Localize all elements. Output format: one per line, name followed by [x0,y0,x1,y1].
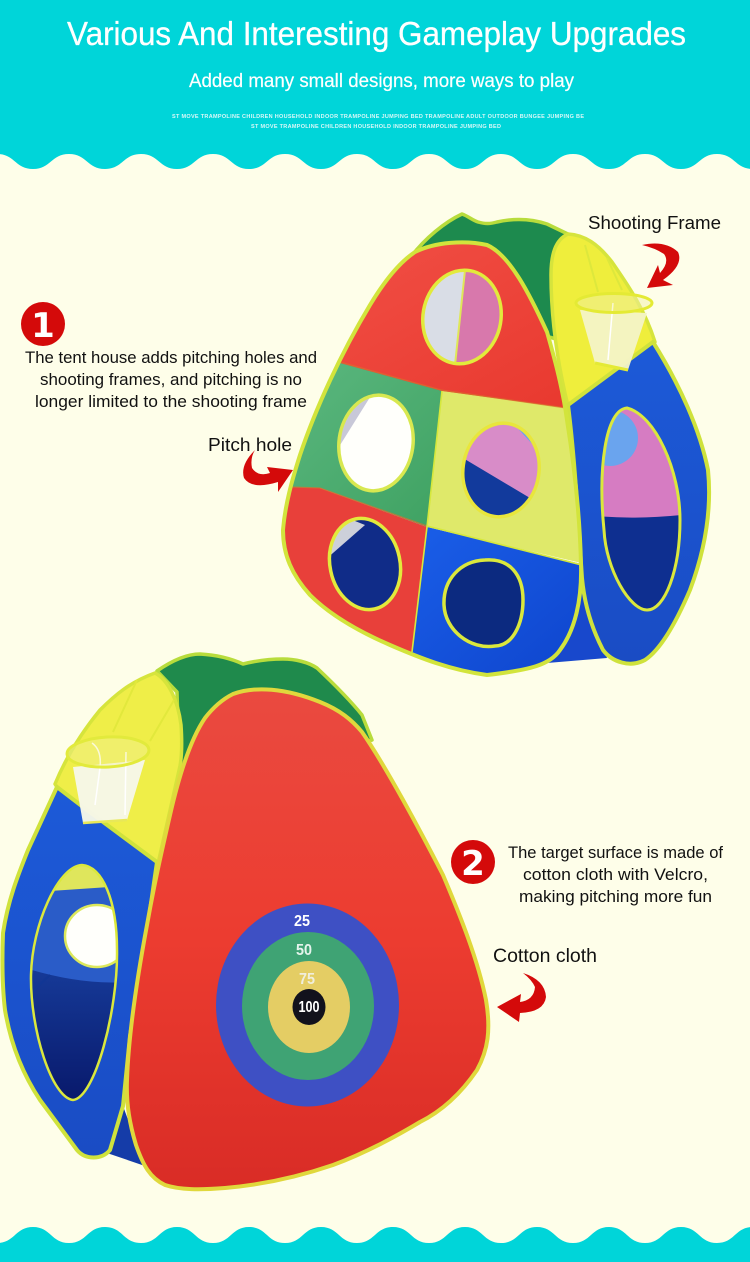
callout 2 text: The target surface is made of [508,844,723,862]
basketball shooting frame [576,245,652,370]
callout 1 text: shooting frames, and pitching is no [40,371,302,389]
blue side panel with opening [2,787,157,1158]
label: shooting frame: Shooting Frame [588,212,721,233]
front panel outline [283,242,581,675]
arrow: cotton cloth [497,973,546,1022]
tent back green roof [410,214,572,340]
target: 100 [298,999,320,1016]
red target panel [127,689,488,1189]
fine print: ST MOVE TRAMPOLINE CHILDREN HOUSEHOLD INDOOR TRAMPOLINE JUMPING BED [251,124,501,130]
callout 2 text: cotton cloth with Velcro, [523,866,708,884]
tent photo: front with pitching holes [270,214,709,680]
callout 1 text: longer limited to the shooting frame [35,393,307,411]
hole: top [421,268,503,366]
title: Various And Interesting Gameplay Upgrades [67,15,686,52]
footer wave [0,1227,750,1262]
blue side panel with tall opening [568,342,709,664]
callout 2 text [508,844,723,906]
hole: red panel [328,516,402,612]
callout 1 text [25,349,317,411]
callout 2 badge [451,840,495,884]
target [216,904,399,1106]
target: 75 [299,971,315,988]
basket [66,680,174,823]
hole: blue panel [444,560,523,647]
subtitle: Added many small designs, more ways to play [189,71,574,92]
yellow side panel [55,673,182,868]
callout 1 badge: 1 [31,306,55,346]
callout 2 badge: 2 [461,844,485,884]
header band [0,0,750,169]
target: 50 [296,942,312,959]
fine print [172,114,584,130]
callout 2 text: making pitching more fun [519,888,712,906]
target: 25 [294,913,310,930]
fine print: ST MOVE TRAMPOLINE CHILDREN HOUSEHOLD INDOOR TRAMPOLINE JUMPING BED TRAMPOLINE ADULT OUTDOOR BUNGEE JUMPING BE [172,114,584,120]
tent photo: back with target [2,654,488,1189]
arrow: pitch hole [243,450,293,492]
hole: green panel [337,393,415,493]
hole: yellow panel [461,421,541,519]
callout 1 badge [21,302,65,346]
green roof [157,654,372,790]
callout 1 text: The tent house adds pitching holes and [25,349,317,367]
dark side gusset [107,1106,145,1166]
arrow: shooting frame [642,244,679,288]
front panels [285,244,580,673]
yellow side panel [551,234,655,406]
label: pitch hole: Pitch hole [208,434,292,455]
label: cotton cloth: Cotton cloth [493,946,597,967]
dark side gusset [547,575,607,663]
